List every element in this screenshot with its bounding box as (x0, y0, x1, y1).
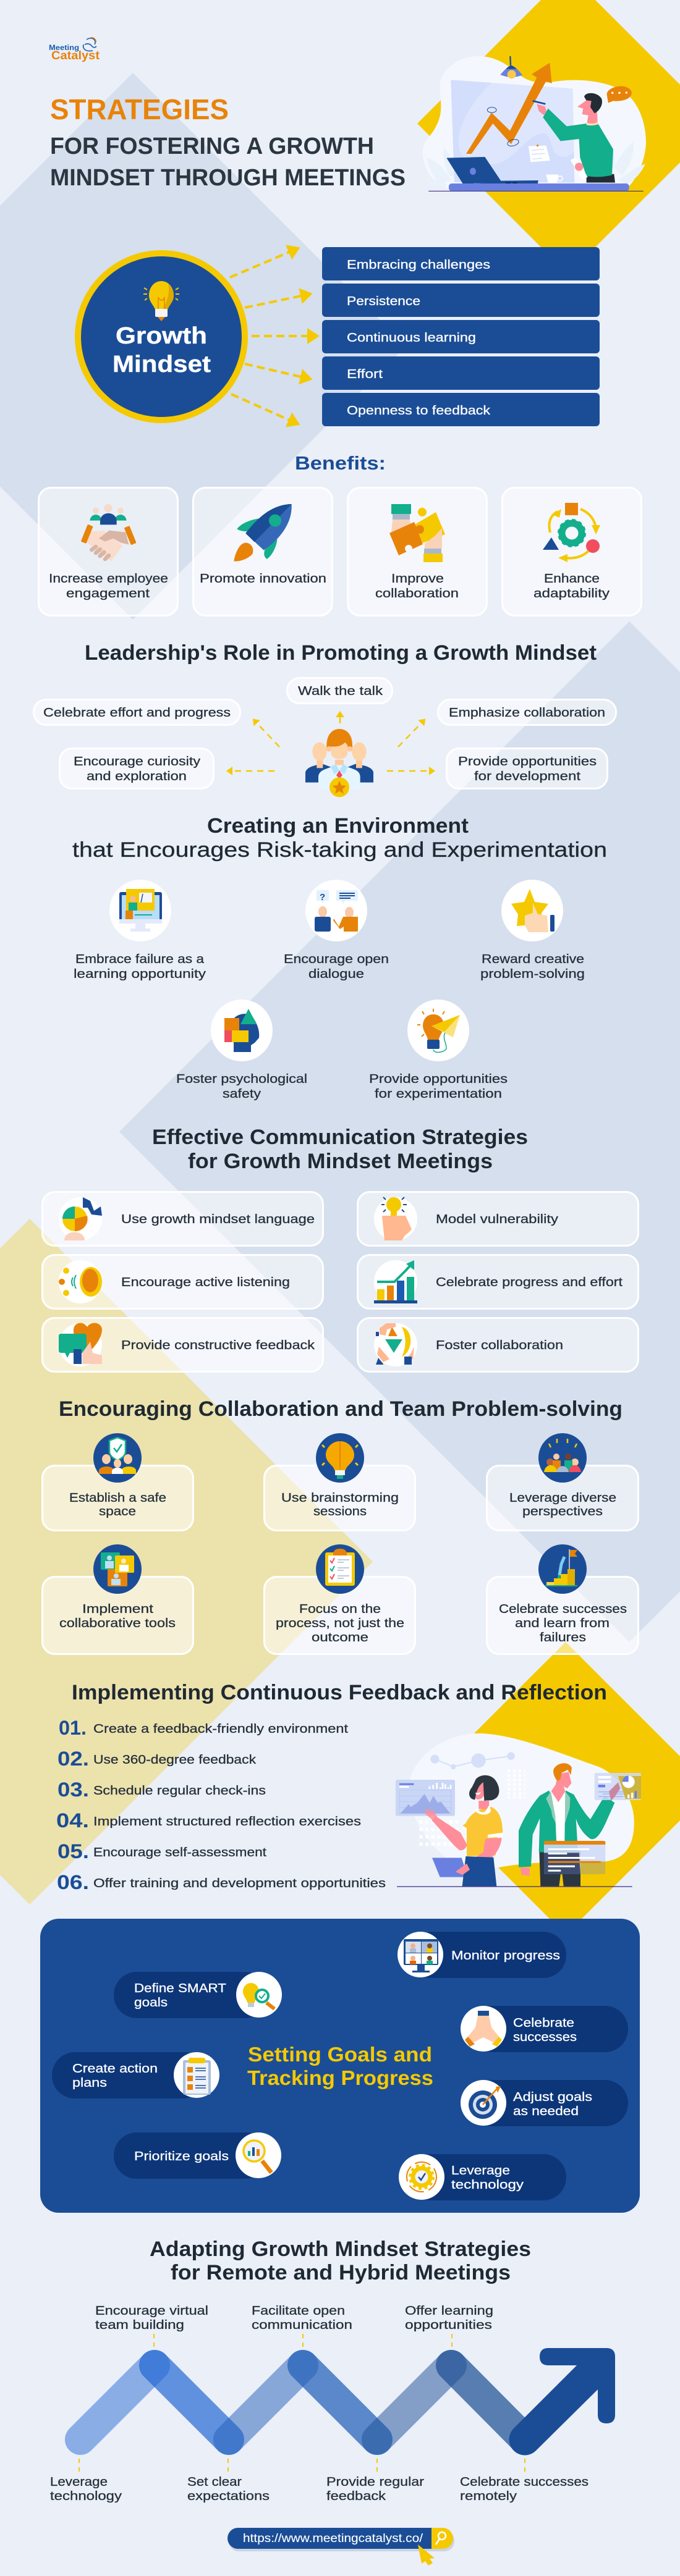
numbered feedback list: Encourage self-assessment (93, 1846, 266, 1859)
item: opportunities for experimentation (369, 1000, 508, 1101)
trait list: Effort (347, 368, 383, 381)
top labels: opportunities (405, 2318, 492, 2332)
numbered feedback list: Create a feedback-friendly environment (93, 1722, 349, 1736)
card: focus on process: process, not just the (276, 1617, 404, 1630)
card: active listening: Encourage active listening (121, 1276, 290, 1289)
item: encourage dialogue (284, 880, 389, 981)
goal pill: create action plans: Create action (72, 2062, 158, 2076)
heading: communication strategies: Effective Communication Strategies (152, 1126, 528, 1149)
numbered feedback list: 01. (59, 1717, 87, 1739)
card: growth mindset language: Use growth mindset language (121, 1213, 315, 1226)
benefit card: employee engagement (38, 488, 178, 615)
numbered feedback list: Implement structured reflection exercises (93, 1815, 361, 1829)
trait list: Persistence (347, 295, 420, 308)
heading: communication strategies (152, 1126, 528, 1173)
card: constructive feedback (42, 1318, 323, 1371)
bottom labels: Leverage (50, 2475, 108, 2489)
card: safe space: space (99, 1505, 136, 1518)
pill: emphasize collaboration: Emphasize collaboration (449, 706, 605, 720)
top labels: team building (95, 2318, 184, 2332)
numbered feedback list: Use 360-degree feedback (93, 1753, 257, 1767)
title (50, 93, 406, 191)
goal pill: adjust goals: as needed (513, 2105, 579, 2118)
heading: remote and hybrid: Adapting Growth Mindset Strategies (150, 2237, 531, 2261)
icon: two people talking: ? (320, 892, 325, 903)
goal pill: monitor progress: Monitor progress (451, 1949, 560, 1963)
goal pill: monitor progress (397, 1932, 566, 1978)
icon: hands with pie pieces (376, 1323, 414, 1365)
icon: magnifier (436, 2532, 446, 2544)
hero illustration: man drawing rising arrow on a board (423, 56, 646, 191)
icon: online lesson monitor (119, 889, 162, 932)
icon: cursor (418, 2544, 435, 2565)
pill: provide opportunities: for development (474, 770, 581, 783)
card: model vulnerability (357, 1192, 638, 1245)
panel: collaboration cards (42, 1433, 638, 1654)
top labels: Offer learning (405, 2304, 493, 2318)
bottom labels: feedback (326, 2490, 386, 2503)
illustration: two colleagues with data panels (396, 1733, 641, 1887)
icon: light bulb (143, 281, 179, 321)
numbered feedback list: 02. (57, 1748, 89, 1770)
heading: remote and hybrid: for Remote and Hybrid Meetings (171, 2261, 511, 2284)
pill: walk the talk: Walk the talk (298, 684, 383, 698)
website url button: https://www.meetingcatalyst.co/ (243, 2532, 423, 2545)
title: MINDSET THROUGH MEETINGS (50, 165, 406, 191)
card: safe space (42, 1433, 193, 1531)
pill: provide opportunities: Provide opportunities (458, 755, 597, 768)
card: collaborative tools (42, 1544, 193, 1654)
heading: benefits: Benefits: (295, 452, 386, 474)
item: encourage dialogue: Encourage open (284, 953, 389, 966)
pill: encourage curiosity: and exploration (87, 770, 187, 783)
goal pill: leverage technology: technology (451, 2178, 524, 2192)
numbered feedback list (56, 1717, 386, 1893)
icon: puzzle mind (62, 1197, 102, 1240)
goal pill: adjust goals (461, 2080, 628, 2126)
item: psychological safety: safety (223, 1087, 261, 1101)
benefit card: collaboration: collaboration (375, 587, 459, 600)
panel title (247, 2043, 433, 2089)
item: psychological safety (176, 1000, 307, 1101)
heading: encouraging collaboration: Encouraging Collaboration and Team Problem-solving (59, 1397, 623, 1421)
panel: environment items (74, 880, 585, 1101)
pill: encourage curiosity: Encourage curiosity (74, 755, 200, 768)
heading: communication strategies: for Growth Mindset Meetings (188, 1150, 493, 1173)
card: model vulnerability: Model vulnerability (436, 1213, 558, 1226)
card: active listening (42, 1255, 323, 1308)
goal pill: celebrate successes (461, 2006, 628, 2052)
bottom labels: expectations (187, 2490, 270, 2503)
card: celebrate progress (357, 1255, 638, 1308)
pill: celebrate effort: Celebrate effort and progress (43, 706, 231, 720)
card: diverse perspectives: perspectives (522, 1505, 603, 1518)
benefit card: adaptability: Enhance (544, 572, 600, 586)
card: collaborative tools: Implement (82, 1602, 154, 1616)
benefit card: employee engagement: engagement (66, 587, 150, 600)
card: focus on process: outcome (312, 1631, 368, 1644)
goal pill: create action plans: plans (72, 2076, 107, 2090)
website url button (227, 2528, 454, 2565)
card: celebrate successes (487, 1544, 638, 1654)
card: celebrate progress: Celebrate progress and effort (436, 1276, 623, 1289)
icon: gear and shapes (543, 503, 600, 562)
goal pill: define smart goals: Define SMART (134, 1982, 226, 1995)
numbered feedback list: Schedule regular check-ins (93, 1784, 266, 1798)
icon: climbing to flag (545, 1549, 577, 1586)
logo: Meeting (49, 43, 79, 52)
icon: joined hands (465, 2011, 502, 2047)
icon: feedback thumb and heart (59, 1323, 102, 1364)
card: brainstorming: Use brainstorming (281, 1491, 399, 1505)
goal pill: celebrate successes: Celebrate (513, 2016, 574, 2030)
icon: ear (59, 1267, 102, 1297)
icon: rocket (234, 504, 292, 562)
bottom labels (50, 2459, 589, 2503)
bottom labels: technology (50, 2490, 122, 2503)
growth mindset circle: Mindset (113, 351, 211, 377)
pill: encourage curiosity (59, 749, 214, 788)
icon: magnifier over chart (244, 2140, 271, 2173)
bottom labels: Celebrate successes (460, 2475, 589, 2489)
top labels: Encourage virtual (95, 2304, 208, 2318)
item: opportunities for experimentation: Provide opportunities (369, 1072, 508, 1086)
goal pill: leverage technology: Leverage (451, 2164, 510, 2178)
arrows from leader (232, 717, 430, 771)
icon: bulb with paper plane (417, 1009, 460, 1052)
numbered feedback list: 03. (57, 1778, 89, 1801)
heading: creating an environment (72, 814, 607, 862)
goal pill: define smart goals (114, 1972, 282, 2018)
card: collaborative tools: collaborative tools (59, 1617, 176, 1630)
item: embrace failure: Embrace failure as a (75, 953, 205, 966)
icon: thumbs-up star (511, 889, 555, 932)
top labels (95, 2304, 493, 2347)
card: brainstorming: sessions (313, 1505, 367, 1518)
trait list: Embracing challenges (347, 258, 490, 272)
goal pill: prioritize goals: Prioritize goals (134, 2150, 229, 2163)
goal pill: leverage technology (399, 2154, 566, 2200)
title: FOR FOSTERING A GROWTH (50, 133, 374, 159)
growth mindset circle (78, 253, 245, 420)
card: brainstorming (265, 1433, 415, 1531)
pill: emphasize collaboration (438, 699, 616, 725)
growth mindset circle: Growth (116, 323, 207, 349)
title: STRATEGIES (50, 93, 229, 125)
top labels: communication (252, 2318, 352, 2332)
arrows from circle to traits (230, 252, 308, 420)
benefit card: innovation: Promote innovation (200, 572, 326, 586)
trait list (322, 247, 600, 426)
item: psychological safety: Foster psychological (176, 1072, 307, 1086)
bottom labels: remotely (460, 2490, 517, 2503)
card: foster collaboration: Foster collaboration (436, 1339, 563, 1352)
card: focus on process (265, 1544, 415, 1654)
card: safe space: Establish a safe (69, 1491, 166, 1505)
pill: provide opportunities (446, 749, 607, 788)
goal pill: prioritize goals (114, 2132, 281, 2179)
icon: shield over team (99, 1437, 136, 1474)
icon: gear with check (407, 2162, 436, 2192)
zigzag growth arrow (80, 2348, 615, 2455)
goal pill: create action plans (52, 2052, 219, 2098)
icon: video call windows (101, 1552, 134, 1586)
icon: brain bulb (322, 1441, 358, 1479)
heading: remote and hybrid (150, 2237, 531, 2284)
bottom labels: Set clear (187, 2475, 242, 2489)
item: reward problem-solving (480, 880, 585, 981)
numbered feedback list: 05. (57, 1840, 89, 1863)
goal pill: adjust goals: Adjust goals (513, 2090, 592, 2104)
heading: continuous feedback: Implementing Continuous Feedback and Reflection (72, 1681, 607, 1704)
panel title: Tracking Progress (247, 2066, 433, 2089)
card: constructive feedback: Provide constructive feedback (121, 1339, 315, 1352)
numbered feedback list: 06. (57, 1871, 89, 1893)
item: embrace failure (74, 880, 206, 981)
item: opportunities for experimentation: for experimentation (375, 1087, 502, 1101)
pill: walk the talk (287, 678, 392, 703)
card: growth mindset language (42, 1192, 323, 1245)
numbered feedback list: 04. (56, 1809, 89, 1832)
top labels: Facilitate open (252, 2304, 345, 2318)
trait list: Openness to feedback (347, 404, 491, 418)
goal pill: define smart goals: goals (134, 1996, 168, 2010)
icon: two people talking (315, 890, 358, 932)
card: celebrate successes: failures (540, 1631, 586, 1644)
pill: celebrate effort (33, 699, 240, 725)
card: celebrate successes: and learn from (515, 1617, 610, 1630)
panel title: Setting Goals and (248, 2043, 432, 2066)
benefit card: collaboration (347, 488, 487, 615)
benefit card: adaptability: adaptability (533, 587, 610, 600)
item: embrace failure: learning opportunity (74, 967, 206, 981)
leadership diagram (33, 678, 616, 797)
numbered feedback list: Offer training and development opportunities (93, 1877, 386, 1890)
heading: creating an environment: Creating an Environment (207, 814, 469, 838)
item: reward problem-solving: Reward creative (482, 953, 584, 966)
icon: video call monitor (404, 1939, 438, 1972)
card: focus on process: Focus on the (299, 1602, 381, 1616)
item: encourage dialogue: dialogue (308, 967, 364, 981)
icon: puzzle hands (389, 504, 445, 562)
icon: checklist clipboard (325, 1549, 355, 1586)
heading: creating an environment: that Encourages Risk-taking and Experimentation (72, 838, 607, 862)
icon: action plan clipboard (183, 2058, 211, 2095)
icon: bulb over head (381, 1197, 412, 1240)
benefit card: employee engagement: Increase employee (49, 572, 168, 586)
card: diverse perspectives: Leverage diverse (509, 1491, 616, 1505)
icon: target (469, 2086, 501, 2119)
goal pill: celebrate successes: successes (513, 2031, 577, 2044)
icon: head with puzzle (224, 1009, 259, 1052)
benefit card: innovation (193, 488, 333, 615)
icon: bar chart with arrow (374, 1260, 417, 1303)
icon: bulb and magnifier (243, 1983, 274, 2009)
benefit card: collaboration: Improve (391, 572, 444, 586)
panel: communication cards (42, 1192, 638, 1371)
panel: benefits (38, 488, 642, 615)
card: celebrate successes: Celebrate successes (499, 1602, 627, 1616)
benefit card: adaptability (502, 488, 642, 615)
item: reward problem-solving: problem-solving (480, 967, 585, 981)
card: diverse perspectives (487, 1433, 638, 1531)
bottom labels: Provide regular (326, 2475, 424, 2489)
trait list: Continuous learning (347, 331, 476, 345)
icon: diverse group (544, 1439, 581, 1472)
panel: setting goals and tracking progress (40, 1919, 640, 2213)
card: foster collaboration (357, 1318, 638, 1371)
logo (49, 38, 100, 62)
icon: handshake (81, 504, 137, 561)
logo: Catalyst (51, 49, 100, 62)
icon: leader with medal (305, 729, 373, 797)
heading: leadership: Leadership's Role in Promoting a Growth Mindset (85, 641, 597, 665)
